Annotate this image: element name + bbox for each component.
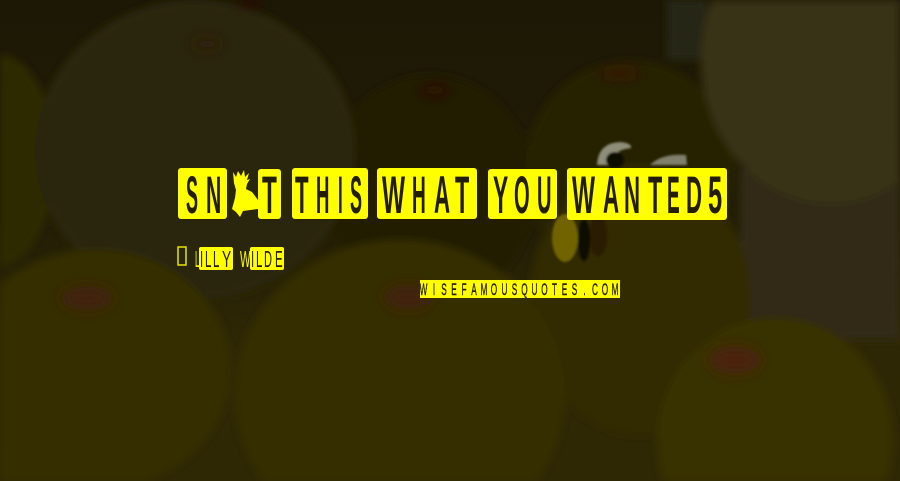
title letters: H xyxy=(412,166,426,225)
highlight boxes behind the title xyxy=(178,168,727,220)
title letters: T xyxy=(455,165,469,225)
author name: L xyxy=(205,247,211,272)
title quote xyxy=(178,164,727,225)
author name: L xyxy=(213,247,219,272)
title letters: H xyxy=(316,166,329,225)
icon: bee behind the quote xyxy=(552,142,687,262)
author name: D xyxy=(264,247,272,272)
author name xyxy=(195,246,283,273)
author name: L xyxy=(256,247,262,272)
title letters: O xyxy=(514,167,530,225)
author name: W xyxy=(240,247,250,272)
title letters: U xyxy=(537,167,552,225)
title letters: E xyxy=(667,166,680,225)
watermark badge: WISEFAMOUSQUOTES.COM xyxy=(420,280,618,299)
author name: I xyxy=(251,247,254,272)
title letters: I xyxy=(338,166,343,225)
title letters: A xyxy=(603,165,619,225)
title letters: D xyxy=(686,165,702,225)
title letters: Y xyxy=(493,165,508,225)
title letters: N xyxy=(206,164,221,225)
icon: punk figure replacing the apostrophe xyxy=(232,170,258,217)
title letters: 5 xyxy=(708,165,722,224)
title letters: W xyxy=(572,165,595,225)
title letters: A xyxy=(434,165,450,225)
author name: L xyxy=(195,246,200,272)
title letters: N xyxy=(624,165,640,225)
author name box xyxy=(199,247,284,270)
author name: I xyxy=(200,247,203,272)
title letters: S xyxy=(350,166,362,225)
author name: E xyxy=(275,247,283,272)
title letters: T xyxy=(295,165,309,225)
author name: Y xyxy=(222,248,231,273)
title letters: S xyxy=(186,166,198,225)
author: outlined bullet and name xyxy=(178,246,284,273)
title letters: T xyxy=(262,165,277,225)
title letters: W xyxy=(382,165,405,225)
title letters xyxy=(186,164,722,225)
title letters: T xyxy=(648,165,662,225)
icon: outlined square bullet xyxy=(178,247,186,265)
